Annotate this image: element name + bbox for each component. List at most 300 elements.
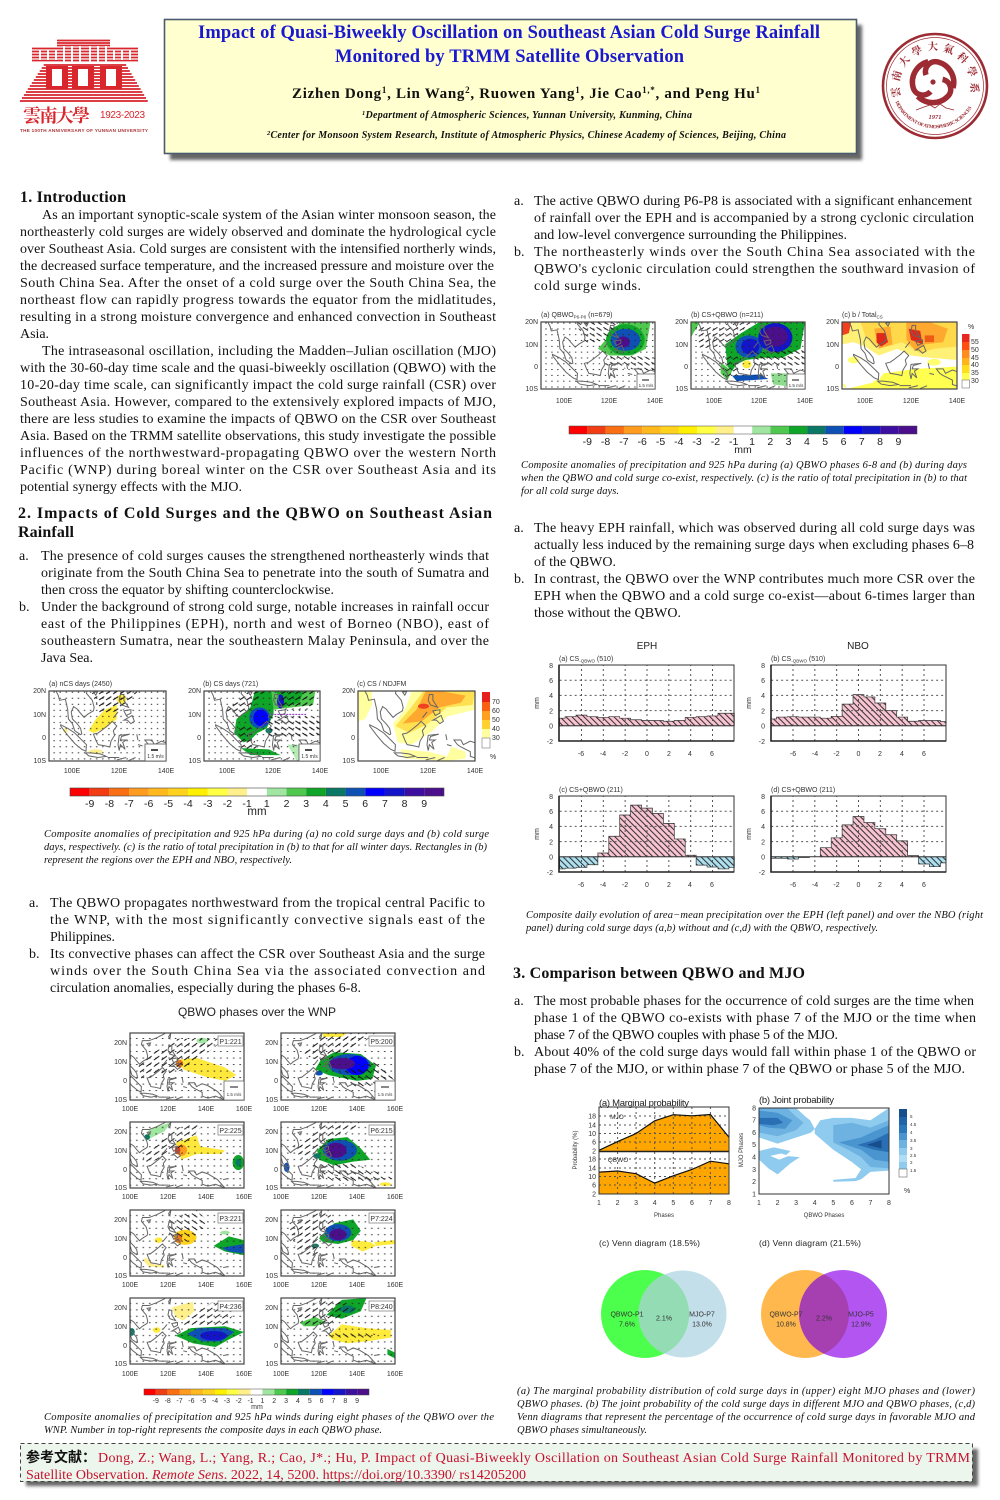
bar chart: NBO with QBWO: (d) CS+QBWO (211) bbox=[771, 787, 835, 794]
map: P7: 100E bbox=[273, 1282, 289, 1289]
authors: , Lin Wang bbox=[387, 86, 465, 102]
map: CS days: 120E bbox=[265, 768, 281, 775]
text block: introduction: influences of the northwestward-propagating QBWO over the western North bbox=[20, 446, 496, 461]
section 2 heading bbox=[18, 505, 492, 541]
text block: active QBWO list: b. bbox=[514, 245, 524, 260]
map: P6 bbox=[265, 1118, 403, 1201]
legend: joint probability scale: 4 bbox=[910, 1130, 913, 1135]
map: P8: 10N bbox=[265, 1324, 278, 1331]
map: QBWO phases 6-8: (n=679) bbox=[586, 312, 612, 319]
colour bar: QBWO phases: 5 bbox=[308, 1398, 312, 1405]
bar chart: EPH without QBWO: -2 bbox=[547, 739, 553, 746]
bar chart: NBO without QBWO: 4 bbox=[900, 751, 904, 758]
map: CS+QBWO: 20N bbox=[675, 319, 688, 326]
colour bar: precipitation: 8 bbox=[877, 436, 883, 448]
venn diagram: 21.5%: MJO-P5 bbox=[848, 1312, 874, 1318]
bar chart: NBO with QBWO: 4 bbox=[900, 882, 904, 889]
text block: EPH rainfall list: those without the QBWO. bbox=[534, 606, 681, 621]
text block: cold surge impacts list: Under the background of strong cold surge, notable increases in rainfall occur bbox=[41, 600, 489, 615]
bar chart: EPH with QBWO: -6 bbox=[578, 882, 584, 889]
map: CS days bbox=[188, 675, 348, 775]
map: CS / NDJFM ratio: 120E bbox=[420, 768, 436, 775]
map: P5: 140E bbox=[349, 1106, 365, 1113]
bar chart: EPH without QBWO: -2 bbox=[622, 751, 628, 758]
authors: 1 bbox=[382, 85, 387, 95]
bar chart: NBO without QBWO: -4 bbox=[812, 751, 818, 758]
text block: EPH rainfall list: The heavy EPH rainfall, which was observed during all cold surge days was bbox=[534, 521, 975, 536]
map: P1: P1:221 bbox=[219, 1039, 242, 1046]
map: P7: 0 bbox=[274, 1255, 278, 1262]
map: P2: P2:225 bbox=[219, 1128, 242, 1135]
legend: joint probability scale: 3.5 bbox=[910, 1138, 917, 1143]
text block: active QBWO list: cold surge winds. bbox=[534, 279, 641, 294]
map: P1: 20N bbox=[114, 1040, 127, 1047]
map: P4: P4:236 bbox=[219, 1304, 242, 1311]
map: P6: 120E bbox=[311, 1194, 327, 1201]
area chart: marginal probability: 2 bbox=[592, 1192, 596, 1198]
colour bar: QBWO phases: -7 bbox=[176, 1398, 183, 1405]
map: nCS days: 120E bbox=[111, 768, 127, 775]
legend: joint probability scale bbox=[899, 1109, 917, 1195]
caption: figure 1: represent the regions over the EPH and NBO, respectively. bbox=[44, 855, 292, 866]
text block: comparison list: phase 1 of the QBWO co-exists with phase 7 of the MJO or the time when bbox=[534, 1011, 976, 1026]
text block: cold surge impacts list: The presence of cold surges causes the strengthened northeasterly winds that bbox=[41, 549, 489, 564]
bar chart: EPH with QBWO: mm bbox=[534, 828, 541, 840]
map: P5: 20N bbox=[265, 1040, 278, 1047]
bar chart: NBO without QBWO: 6 bbox=[761, 678, 765, 685]
map: b / Total CS ratio: 140E bbox=[949, 398, 965, 405]
map: QBWO phases 6-8: 100E bbox=[556, 398, 572, 405]
colour bar: precipitation: -7 bbox=[124, 798, 134, 810]
map: P3: 160E bbox=[236, 1282, 252, 1289]
map: nCS days: 140E bbox=[158, 768, 174, 775]
area chart: marginal probability bbox=[573, 1098, 731, 1219]
affiliations: Center for Monsoon System Research, Institute of Atmospheric Physics, Chinese Academy of Sciences, Beijing, China bbox=[270, 130, 786, 141]
text block: active QBWO list bbox=[514, 194, 975, 294]
colour bar: precipitation: mm bbox=[247, 806, 267, 818]
venn diagram: 21.5%: 10.8% bbox=[776, 1322, 796, 1328]
text block: EPH rainfall list: of the QBWO. bbox=[534, 555, 616, 570]
logo: department of atmospheric sciences seal: DEPARTMENT OF ATMOSPHERIC SCIENCES bbox=[896, 100, 972, 128]
map: CS+QBWO: 1.5 m/s bbox=[789, 383, 804, 388]
bar chart: NBO with QBWO: 2 bbox=[761, 840, 765, 846]
bar chart: EPH without QBWO: 4 bbox=[688, 751, 692, 758]
bar chart: EPH with QBWO: -2 bbox=[547, 870, 553, 877]
colour bar: QBWO phases: -3 bbox=[224, 1398, 230, 1405]
map: P2: 100E bbox=[122, 1194, 138, 1201]
map: P4: 20N bbox=[114, 1305, 127, 1312]
colour bar: QBWO phases: -5 bbox=[200, 1398, 206, 1405]
colour bar: precipitation: 4 bbox=[323, 798, 329, 810]
map: QBWO phases 6-8: 120E bbox=[601, 398, 617, 405]
title bbox=[198, 23, 820, 67]
colour bar: precipitation: 2 bbox=[284, 798, 290, 810]
colour bar: QBWO phases: 8 bbox=[343, 1398, 347, 1405]
map: P4: 10N bbox=[114, 1324, 127, 1331]
caption: figure 1: Composite anomalies of precipitation and 925 hPa during (a) no cold surge days and (b) cold surge bbox=[44, 829, 489, 840]
authors: 1 bbox=[756, 85, 760, 95]
text block: comparison list bbox=[514, 994, 976, 1077]
map: QBWO phases 6-8 bbox=[525, 306, 682, 405]
text block: introduction: with the 30-60-day time scale and the quasi-biweekly oscillation (QBWO) with the bbox=[20, 361, 496, 376]
bar chart: NBO with QBWO: -6 bbox=[790, 882, 796, 889]
legend: ratio colour scale bbox=[482, 692, 500, 761]
map: QBWO phases 6-8: 1.5 m/s bbox=[639, 383, 654, 388]
caption: probability figure: QBWO phases. (b) The joint probability of the cold surge days in different MJO and QBWO phases, (c,d) bbox=[517, 1399, 976, 1410]
text block: EPH rainfall list bbox=[514, 521, 975, 621]
colour bar: precipitation: -1 bbox=[729, 436, 739, 448]
bar chart: NBO without QBWO: 8 bbox=[761, 663, 765, 670]
bar chart: EPH with QBWO: -4 bbox=[600, 882, 606, 889]
map: P6: 0 bbox=[274, 1167, 278, 1174]
map: CS days: 140E bbox=[312, 768, 328, 775]
map: nCS days: (a) nCS days (2450) bbox=[49, 681, 112, 688]
bar chart: EPH without QBWO: 0 bbox=[549, 724, 553, 730]
legend: ratio colour scale bbox=[962, 324, 979, 388]
map: P1: 10N bbox=[114, 1059, 127, 1066]
venn diagram: 18.5%: 2.1% bbox=[656, 1316, 672, 1322]
map: CS+QBWO: (b) CS+QBWO (n=211) bbox=[691, 312, 763, 319]
bar chart: EPH without QBWO: 2 bbox=[667, 751, 671, 758]
map: P8 bbox=[265, 1294, 403, 1378]
text block: EPH rainfall list: In contrast, the QBWO over the WNP contributes much more CSR over the bbox=[534, 572, 975, 587]
legend: ratio colour scale: 50 bbox=[492, 717, 500, 724]
caption: QBWO phases figure bbox=[44, 1412, 494, 1436]
bar chart: EPH without QBWO: -6 bbox=[578, 751, 584, 758]
caption: probability figure: QBWO phases simultaneously. bbox=[517, 1425, 647, 1436]
text block: introduction: northeast flow can rapidly progress towards the equator from the midlatitudes, bbox=[20, 293, 496, 308]
map: CS / NDJFM ratio: 140E bbox=[467, 768, 483, 775]
bar chart: NBO with QBWO: -2 bbox=[759, 870, 765, 877]
venn diagram: 21.5%: (d) Venn diagram (21.5%) bbox=[759, 1238, 861, 1248]
text block: QBWO propagation list: the WNP, with the most significantly convective signals east of the bbox=[50, 913, 485, 928]
authors: , Jie Cao bbox=[580, 86, 641, 102]
figure title: QBWO phases over the WNP bbox=[178, 1005, 336, 1019]
colour bar: QBWO phases: -1 bbox=[247, 1398, 254, 1405]
map: P2: 120E bbox=[160, 1194, 176, 1201]
text block: comparison list: The most probable phases for the occurrence of cold surges are the time when bbox=[534, 994, 974, 1009]
caption: figure 2: for all cold surge days. bbox=[521, 486, 619, 497]
reference panel bbox=[20, 1444, 978, 1486]
logo: Yunnan University centenary: 雲南大學 bbox=[23, 102, 90, 128]
colour bar: QBWO phases: 2 bbox=[272, 1398, 276, 1405]
area chart: marginal probability: 14 bbox=[588, 1166, 596, 1172]
bar chart: EPH with QBWO: 0 bbox=[549, 854, 553, 862]
authors: Zizhen Dong bbox=[292, 86, 381, 102]
map: QBWO phases 6-8: 10S bbox=[526, 386, 538, 393]
map: P5: P5:200 bbox=[370, 1039, 393, 1046]
logo: Yunnan University centenary bbox=[20, 40, 148, 133]
map: P8: 0 bbox=[274, 1343, 278, 1350]
map: P5 bbox=[265, 1029, 403, 1113]
legend: joint probability scale: 5 bbox=[910, 1114, 913, 1119]
area chart: marginal probability: 2 bbox=[592, 1148, 596, 1156]
contour chart: joint probability: 2 bbox=[752, 1179, 756, 1186]
text block: introduction: South China Sea. After the onset of a cold surge over the South China Sea, the bbox=[20, 276, 496, 291]
map: P8: 160E bbox=[387, 1371, 403, 1378]
map: P1: 120E bbox=[160, 1106, 176, 1113]
area chart: marginal probability: 6 bbox=[592, 1140, 596, 1146]
logo: department of atmospheric sciences seal bbox=[882, 32, 988, 140]
venn diagram: 21.5%: QBWO-P7 bbox=[769, 1312, 803, 1318]
colour bar: precipitation: 5 bbox=[343, 798, 349, 810]
map: b / Total CS ratio: (c) b / Total bbox=[842, 312, 876, 319]
contour chart: joint probability: 8 bbox=[887, 1200, 891, 1207]
map: CS days: (b) CS days (721) bbox=[203, 681, 258, 688]
map: CS days: 10N bbox=[188, 712, 201, 719]
text block: QBWO propagation list: Its convective phases can affect the CSR over Southeast Asia and the surge bbox=[50, 947, 485, 962]
bar chart: EPH without QBWO bbox=[534, 656, 734, 758]
caption: probability figure: Venn diagrams that represent the percentage of the occurrence of cold surge days in favorable MJO and bbox=[517, 1412, 976, 1423]
map: P3: P3:221 bbox=[219, 1216, 242, 1223]
bar chart: EPH with QBWO: -2 bbox=[622, 882, 628, 889]
contour chart: joint probability: 6 bbox=[752, 1130, 756, 1137]
colour bar: precipitation: -8 bbox=[601, 436, 610, 448]
text block: introduction: As an important synoptic-scale system of the Asian winter monsoon season, the bbox=[42, 208, 496, 223]
text block: active QBWO list: The active QBWO during P6-P8 is associated with a significant enhancement bbox=[534, 194, 972, 209]
bar chart: NBO with QBWO: 4 bbox=[761, 824, 765, 831]
legend: ratio colour scale: 60 bbox=[492, 708, 500, 715]
bar chart: EPH with QBWO: 6 bbox=[710, 882, 714, 889]
legend: ratio colour scale: 35 bbox=[971, 370, 979, 377]
text block: comparison list: phase 7 of the MJO, or within phase 7 of the QBWO or phase 5 of the MJO. bbox=[534, 1062, 965, 1077]
area chart: marginal probability: 10 bbox=[588, 1174, 596, 1181]
area chart: marginal probability: 3 bbox=[634, 1200, 638, 1207]
text block: EPH rainfall list: a. bbox=[514, 521, 524, 536]
contour chart: joint probability: 5 bbox=[752, 1142, 756, 1149]
caption: figure 2: when the QBWO and cold surge co-exist, respectively. (c) is the ratio of total precipitation in (b) to that bbox=[521, 473, 968, 484]
venn diagram: 18.5%: QBWO-P1 bbox=[610, 1312, 644, 1318]
area chart: marginal probability: 14 bbox=[588, 1122, 596, 1130]
area chart: marginal probability: 4 bbox=[653, 1200, 657, 1207]
bar chart: NBO without QBWO: 0 bbox=[857, 751, 861, 758]
text block: introduction: Southeast Asia. However, compared to the extensively explored impacts of MJO, bbox=[20, 395, 496, 410]
map: P7: 160E bbox=[387, 1282, 403, 1289]
colour bar: QBWO phases: 7 bbox=[331, 1398, 335, 1405]
contour chart: joint probability: 2 bbox=[776, 1200, 780, 1207]
caption: figure 2 bbox=[521, 460, 968, 497]
map: P6: 10S bbox=[266, 1185, 278, 1192]
map: P5: 0 bbox=[274, 1078, 278, 1085]
bar chart: NBO with QBWO: -4 bbox=[812, 882, 818, 889]
colour bar: precipitation: mm bbox=[734, 444, 752, 456]
contour chart: joint probability: 6 bbox=[850, 1200, 854, 1207]
map: CS / NDJFM ratio bbox=[342, 675, 503, 775]
venn diagram: 18.5%: (c) Venn diagram (18.5%) bbox=[599, 1238, 700, 1248]
legend: ratio colour scale: 30 bbox=[971, 378, 979, 385]
legend: ratio colour scale: 45 bbox=[971, 355, 979, 362]
text block: QBWO propagation list: circulation anomalies, especially during the phases 6-8. bbox=[50, 981, 361, 996]
affiliations: Department of Atmospheric Sciences, Yunnan University, Kunming, China bbox=[365, 110, 692, 121]
bar chart: NBO without QBWO: -2 bbox=[833, 751, 840, 758]
map: P7: 140E bbox=[349, 1282, 365, 1289]
legend: ratio colour scale: 40 bbox=[492, 726, 500, 733]
bar chart: NBO with QBWO: 8 bbox=[761, 794, 765, 801]
text block: cold surge impacts list: southeastern Sumatra, near the southeastern Malay Peninsula, and over the bbox=[41, 634, 489, 649]
area chart: marginal probability: 18 bbox=[588, 1156, 596, 1164]
map: QBWO phases 6-8: (a) QBWO bbox=[541, 312, 574, 319]
text block: active QBWO list: and low-level convergence surrounding the Philippines. bbox=[534, 228, 847, 243]
chart title: EPH: EPH bbox=[637, 641, 657, 652]
map: nCS days: 10N bbox=[33, 712, 46, 719]
colour bar: precipitation: -3 bbox=[203, 798, 213, 810]
colour bar: QBWO phases: mm bbox=[251, 1404, 263, 1411]
colour bar: QBWO phases: -9 bbox=[153, 1398, 159, 1405]
text block: active QBWO list: QBWO's cyclonic circulation could strengthen the southward invasion of bbox=[534, 262, 975, 277]
legend: ratio colour scale: 30 bbox=[492, 735, 500, 742]
logo: department of atmospheric sciences seal: 1971 bbox=[928, 114, 942, 121]
bar chart: NBO without QBWO: 6 bbox=[922, 751, 926, 758]
map: CS+QBWO: 10S bbox=[676, 386, 688, 393]
contour chart: joint probability: 7 bbox=[752, 1118, 756, 1124]
bar chart: EPH with QBWO: (c) CS+QBWO (211) bbox=[559, 787, 623, 794]
affiliations: 2 bbox=[266, 130, 271, 137]
map: P1: 100E bbox=[122, 1106, 138, 1113]
text block: EPH rainfall list: EPH when the QBWO and a cold surge co-exist—about 6-times larger than bbox=[534, 589, 975, 604]
section 2 heading: 2. Impacts of Cold Surges and the QBWO on Southeast Asian bbox=[18, 505, 492, 522]
reference text: Dong, Z.; Wang, L.; Yang, R.; Cao, J*.; Hu, P. Impact of Quasi-Biweekly Oscillation on Southeast Asian Cold Surge Rainfall Monitored by TRMM bbox=[98, 1451, 971, 1466]
map: P5: 1.5 m/s bbox=[378, 1092, 393, 1097]
authors: 2 bbox=[465, 85, 470, 95]
text block: introduction: 10-20-day time scale, can significantly impact the cold surge rainfall (CSR) over bbox=[20, 378, 496, 393]
title: Monitored by TRMM Satellite Observation bbox=[335, 47, 685, 67]
bar chart: EPH without QBWO: -4 bbox=[600, 751, 606, 758]
colour bar: QBWO phases: -8 bbox=[165, 1398, 171, 1405]
colour bar: QBWO phases: 4 bbox=[296, 1398, 300, 1405]
caption: daily evolution bbox=[525, 910, 984, 934]
map: P3: 140E bbox=[198, 1282, 214, 1289]
bar chart: NBO with QBWO: 0 bbox=[761, 854, 765, 862]
area chart: marginal probability: (a) Marginal probability bbox=[599, 1098, 689, 1109]
bar chart: EPH without QBWO: 6 bbox=[710, 751, 714, 758]
text block: introduction: Asia. bbox=[20, 327, 49, 342]
text block: cold surge impacts list: a. bbox=[19, 549, 29, 564]
map: CS days: 1.5 m/s bbox=[301, 754, 318, 760]
bar chart: EPH with QBWO: 2 bbox=[667, 882, 671, 889]
map: P7: P7:224 bbox=[370, 1216, 393, 1223]
text block: introduction: resulting in a strong moisture convergence and enhanced convection in Southeast bbox=[20, 310, 496, 325]
contour chart: joint probability: 1 bbox=[752, 1192, 756, 1198]
colour bar: precipitation: 1 bbox=[264, 798, 270, 810]
map: P8: 140E bbox=[349, 1371, 365, 1378]
caption: daily evolution: panel) during cold surge days (a,b) without and (c,d) with the QBWO, respectively. bbox=[525, 923, 878, 934]
map: P3: 120E bbox=[160, 1282, 176, 1289]
area chart: marginal probability: 5 bbox=[671, 1200, 675, 1207]
map: QBWO phases 6-8: P6-P8 bbox=[574, 314, 587, 320]
contour chart: joint probability bbox=[739, 1095, 891, 1219]
map: b / Total CS ratio: 10N bbox=[826, 342, 839, 349]
colour bar: QBWO phases: 9 bbox=[355, 1398, 359, 1405]
text block: introduction: over Southeast Asia. Cold surges are consistent with the intensified northerly winds, bbox=[20, 242, 496, 257]
caption: figure 1 bbox=[44, 829, 489, 866]
contour chart: joint probability: (b) Joint probability bbox=[759, 1095, 834, 1106]
map: CS days: 100E bbox=[219, 768, 235, 775]
colour bar: precipitation: -3 bbox=[692, 436, 702, 448]
colour bar: precipitation: -5 bbox=[164, 798, 173, 810]
map: P2: 10S bbox=[115, 1185, 127, 1192]
colour bar: precipitation: -8 bbox=[105, 798, 114, 810]
bar chart: EPH with QBWO: 0 bbox=[645, 882, 649, 889]
colour bar: precipitation: 6 bbox=[841, 436, 847, 448]
bar chart: EPH without QBWO: 0 bbox=[645, 751, 649, 758]
bar chart: NBO without QBWO: mm bbox=[746, 697, 753, 709]
map: nCS days: 0 bbox=[42, 735, 46, 742]
authors: , and Peng Hu bbox=[655, 86, 755, 102]
contour chart: joint probability: 3 bbox=[794, 1200, 798, 1207]
bar chart: EPH without QBWO: 6 bbox=[549, 678, 553, 685]
caption: figure 2: Composite anomalies of precipitation and 925 hPa during (a) QBWO phases 6-8 and (b) during days bbox=[521, 460, 967, 471]
text block: QBWO propagation list bbox=[29, 896, 485, 996]
figure: MJO and QBWO probability bbox=[573, 1095, 917, 1358]
legend: joint probability scale: 4.5 bbox=[910, 1122, 917, 1127]
map: P5: 10N bbox=[265, 1059, 278, 1066]
colour bar: precipitation: 1 bbox=[749, 436, 755, 448]
legend: joint probability scale: 3 bbox=[910, 1146, 913, 1151]
logo: Yunnan University centenary: 1923-2023 bbox=[100, 110, 145, 121]
map: P3: 100E bbox=[122, 1282, 138, 1289]
bar chart: EPH with QBWO bbox=[534, 787, 734, 889]
bar chart: EPH without QBWO: -QBWO bbox=[579, 658, 595, 664]
map: nCS days: 10S bbox=[34, 758, 46, 765]
area chart: marginal probability: 6 bbox=[592, 1182, 596, 1190]
map: P3: 10S bbox=[115, 1273, 127, 1280]
area chart: marginal probability: MJO bbox=[610, 1114, 624, 1121]
bar chart: NBO without QBWO: 2 bbox=[878, 751, 882, 758]
map: P3: 10N bbox=[114, 1236, 127, 1243]
map: P1: 140E bbox=[198, 1106, 214, 1113]
affiliations: 1 bbox=[362, 110, 365, 117]
map: nCS days: 100E bbox=[64, 768, 80, 775]
colour bar: precipitation: 4 bbox=[804, 436, 810, 448]
map: P3: 0 bbox=[123, 1255, 127, 1262]
colour bar: precipitation: -5 bbox=[656, 436, 665, 448]
map: P2: 0 bbox=[123, 1167, 127, 1174]
bar chart: EPH with QBWO: 6 bbox=[549, 809, 553, 816]
text block: introduction: potential synergy effects with the MJO. bbox=[20, 480, 242, 495]
colour bar: precipitation: -1 bbox=[242, 798, 252, 810]
colour bar: precipitation: -2 bbox=[223, 798, 232, 810]
text block: QBWO propagation list: Philippines. bbox=[50, 930, 115, 945]
map: P6: 140E bbox=[349, 1194, 365, 1201]
text block: active QBWO list: of rainfall over the EPH and is accompanied by a strong cyclonic circulation bbox=[534, 211, 974, 226]
map: P5: 10S bbox=[266, 1097, 278, 1104]
map: P1: 1.5 m/s bbox=[227, 1092, 242, 1097]
figure: cold surge composite maps bbox=[33, 675, 503, 818]
text block: QBWO propagation list: The QBWO propagates northwestward from the tropical central Pacific to bbox=[50, 896, 485, 911]
map: P7: 20N bbox=[265, 1217, 278, 1224]
legend: joint probability scale: % bbox=[904, 1188, 910, 1195]
section 1 heading: Introduction: 1. Introduction bbox=[20, 189, 126, 206]
colour bar: precipitation: 3 bbox=[303, 798, 309, 810]
map: CS days: 20N bbox=[188, 688, 201, 695]
colour bar: precipitation: 9 bbox=[421, 798, 427, 810]
map: P2: 140E bbox=[198, 1194, 214, 1201]
venn diagram: 21.5%: 12.9% bbox=[851, 1322, 871, 1328]
reference text: 参考文献： bbox=[26, 1447, 96, 1467]
venn diagram: 18.5%: MJO-P7 bbox=[689, 1312, 715, 1318]
text block: cold surge impacts list: east of the Philippines (EPH), north and west of Borneo (NBO), east of bbox=[41, 617, 489, 632]
bar chart: NBO with QBWO: 6 bbox=[761, 809, 765, 816]
map: CS / NDJFM ratio: (c) CS / NDJFM bbox=[357, 681, 407, 688]
colour bar: precipitation: 3 bbox=[786, 436, 792, 448]
map: b / Total CS ratio bbox=[826, 306, 985, 405]
legend: joint probability scale: 2 bbox=[910, 1160, 913, 1165]
text block: introduction: northeasterly cold surges are widely observed and dominate the hydrological cycle bbox=[20, 225, 496, 240]
colour bar: QBWO phases: -4 bbox=[212, 1398, 218, 1405]
colour bar: QBWO phases: -6 bbox=[188, 1398, 195, 1405]
map: P4: 10S bbox=[115, 1361, 127, 1368]
text block: QBWO propagation list: b. bbox=[29, 947, 40, 962]
